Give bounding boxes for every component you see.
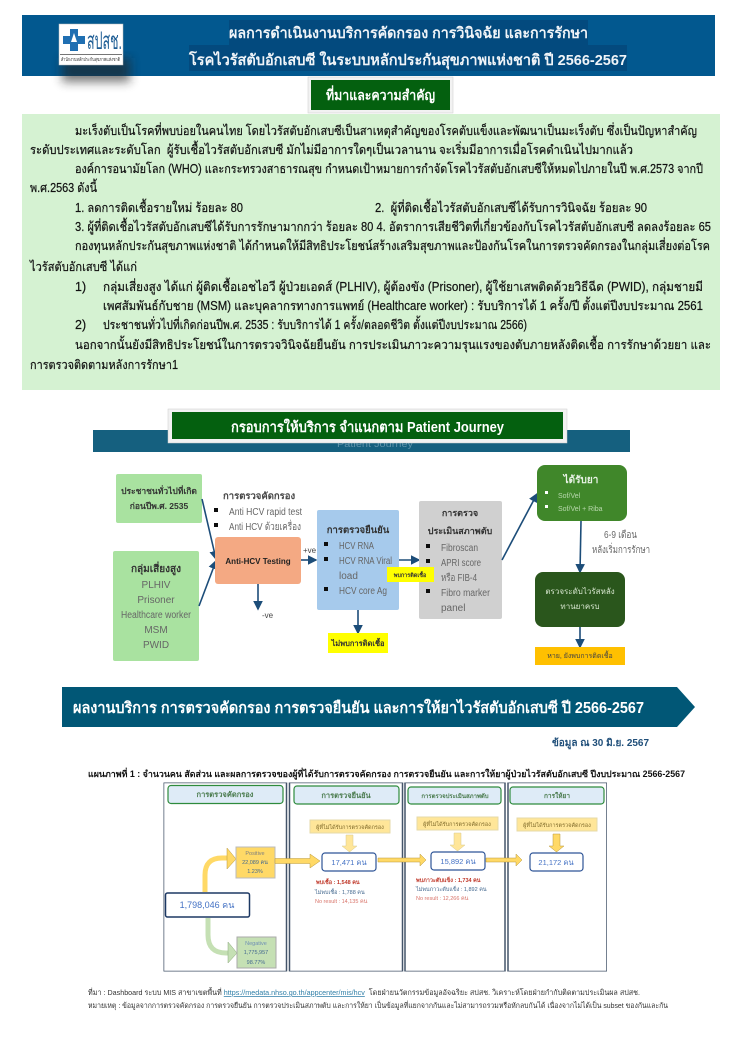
box: liver assessment: การตรวจ: [442, 508, 478, 518]
box: high risk group: PLHIV: [142, 580, 171, 591]
arrow: treatment to test: [580, 521, 581, 572]
arrow: to result: [579, 627, 581, 647]
text: screening list: Anti HCV ด้วยเครื่อง: [229, 519, 301, 533]
confirmation breakdown: [314, 877, 368, 905]
box: treatment count: 21,172 คน: [538, 858, 574, 867]
box: post-treatment viral test: [535, 572, 625, 627]
arrow: to liver assessment: [399, 559, 419, 561]
assessment breakdown: [415, 876, 487, 902]
panel: background text: 2. ผู้ที่ติดเชื้อไวรัสตับอักเสบซีได้รับการวินิจฉัย ร้อยละ 90: [375, 198, 647, 216]
label: infection found: [387, 567, 434, 582]
box: liver assessment: [419, 501, 502, 619]
confirmation breakdown: No result : 14,135 คน: [315, 899, 368, 905]
box: liver assessment: Fibroscan: [441, 543, 478, 554]
box: treatment: [537, 465, 627, 521]
label: no infection: ไม่พบการติดเชื้อ: [330, 637, 385, 648]
footnote: ที่มา : Dashboard ระบบ MIS สาขาเขตพื้นที่ https://medata.nhso.go.th/appcenter/mis/hcv โดยฝ่ายนวัตกรรมข้อมูลอัจฉริยะ สปสช. วิเคราะห์โดยฝ่ายกำกับติดตามประเมินผล สปสช.: [88, 987, 640, 997]
box: high risk group: Healthcare worker: [121, 610, 192, 621]
assessment breakdown: No result : 12,266 คน: [416, 896, 469, 902]
label: result: หาย, ยังพบการติดเชื้อ: [547, 649, 613, 660]
box: treatment: Sof/Vel: [558, 493, 581, 500]
text: screening list: การตรวจคัดกรอง: [223, 491, 295, 502]
label: 6-9 months: 6-9 เดือน: [604, 529, 637, 541]
panel: background text: 1): [75, 280, 86, 294]
panel: background text: 2): [75, 318, 86, 332]
box: positive: 1.23%: [247, 869, 263, 875]
arrow: to negative: [208, 918, 231, 953]
header banner: [22, 15, 715, 82]
box: confirmation: load: [339, 571, 358, 582]
arrow: to treatment count: [486, 854, 522, 866]
panel: liver assessment: ผู้ที่ไม่ได้รับการตรวจคัดกรอง: [423, 820, 491, 828]
confirmation breakdown: พบเชื้อ : 1,548 คน: [315, 877, 360, 886]
text: screening list: Anti HCV rapid test: [229, 507, 302, 518]
label: infection found: พบการติดเชื้อ: [393, 570, 426, 579]
panel: confirmation: ผู้ที่ไม่ได้รับการตรวจคัดกรอง: [316, 823, 384, 831]
box: confirmation: การตรวจยืนยัน: [327, 524, 390, 536]
panel: background text: ระดับประเทศและระดับโลก ผู้รับเชื้อไวรัสตับอักเสบซี มักไม่มีอาการใดๆเป็นเวลานาน จะเริ่มมีอาการเมื่อโรคดำเนินไปมากแล้ว: [30, 140, 633, 158]
box: liver assessment: หรือ FIB-4: [441, 572, 477, 584]
box: high risk group: MSM: [144, 625, 168, 636]
box: negative: 1,775,957: [244, 950, 268, 956]
box: treatment: ได้รับยา: [563, 473, 598, 486]
diagram: patient journey: [113, 465, 650, 665]
box: high risk group: PWID: [143, 640, 169, 651]
box: post-treatment viral test: ตรวจระดับไวรัสหลัง: [545, 587, 615, 596]
heading: patient journey: กรอบการให้บริการ จำแนกตาม Patient Journey: [231, 418, 504, 436]
box: post-treatment viral test: ทานยาครบ: [560, 602, 600, 611]
title: โรคไวรัสตับอักเสบซี ในระบบหลักประกันสุขภาพแห่งชาติ ปี 2566-2567: [188, 50, 627, 70]
banner: results heading: [62, 687, 695, 727]
box: liver assessment: Fibro marker: [441, 588, 491, 599]
logo: สำนักงานหลักประกันสุขภาพแห่งชาติ: [61, 56, 120, 63]
box: confirmation: HCV RNA: [339, 541, 374, 552]
box: confirmation count: [322, 853, 376, 871]
heading: background: ที่มาและความสำคัญ: [326, 85, 435, 104]
box: positive: 22,089 คน: [242, 860, 268, 866]
panel: background text: ไวรัสตับอักเสบซี ได้แก่: [29, 260, 137, 274]
panel: treatment: [486, 782, 607, 972]
label: result: [535, 647, 625, 665]
logo: [59, 24, 130, 82]
panel: background text: 1. ลดการติดเชื้อรายใหม่ ร้อยละ 80: [75, 198, 243, 215]
arrow: to treatment: [502, 494, 537, 560]
panel: screening: การตรวจคัดกรอง: [197, 790, 254, 799]
assessment breakdown: ไม่พบภาวะตับแข็ง : 1,892 คน: [415, 885, 487, 893]
panel: confirmation: การตรวจยืนยัน: [321, 791, 372, 800]
footnote: [88, 987, 668, 1010]
label: 6-9 months: [592, 529, 650, 556]
text: screening list: [214, 491, 302, 533]
box: positive: Positive: [245, 851, 265, 857]
panel: background text: [22, 114, 720, 390]
box: negative: [237, 937, 276, 968]
box: confirmation: HCV core Ag: [339, 586, 387, 597]
box: general population: [116, 474, 202, 523]
box: liver assessment: APRI score: [441, 558, 481, 569]
arrow: positive: [301, 546, 317, 560]
arrow: to assessment count: [378, 854, 426, 866]
assessment breakdown: พบภาวะตับแข็ง : 1,734 คน: [415, 876, 481, 884]
figure caption: แผนภาพที่ 1 : จำนวนคน สัดส่วน และผลการตรวจของผู้ที่ได้รับการตรวจคัดกรอง การตรวจยืนยัน และการให้ยาผู้ป่วยไวรัสตับอักเสบซี ปีงบประมาณ 2566-2567: [88, 767, 685, 780]
banner: results heading: ผลงานบริการ การตรวจคัดกรอง การตรวจยืนยัน และการให้ยาไวรัสตับอักเสบซี ปี 2566-2567: [73, 698, 644, 717]
box: confirmation: [317, 510, 399, 610]
heading: background: [308, 77, 453, 113]
panel: treatment: การให้ยา: [544, 791, 570, 800]
title: ผลการดำเนินงานบริการคัดกรอง การวินิจฉัย และการรักษา: [229, 24, 588, 42]
box: total screened: 1,798,046 คน: [180, 900, 234, 910]
arrow: to positive: [205, 858, 229, 892]
box: liver assessment: ประเมินสภาพตับ: [428, 526, 493, 536]
box: high risk group: กลุ่มเสี่ยงสูง: [131, 561, 181, 576]
heading: patient journey: [93, 409, 630, 452]
box: general population: ประชาชนทั่วไปที่เกิด: [121, 484, 197, 496]
panel: liver assessment: [378, 782, 505, 972]
panel: background text: ประชาชนทั่วไปที่เกิดก่อนปีพ.ศ. 2535 : รับบริการได้ 1 ครั้ง/ตลอดชีวิต ตั้งแต่ปีงบประมาณ 2566): [103, 315, 527, 332]
box: assessment count: [431, 852, 485, 870]
arrows: into testing: [199, 499, 216, 606]
box: liver assessment: panel: [441, 603, 465, 614]
box: confirmation: HCV RNA Viral: [339, 556, 392, 567]
arrow: negative: -ve: [262, 611, 274, 620]
arrow: positive: +ve: [303, 546, 317, 555]
box: negative: Negative: [245, 941, 267, 947]
panel: background text: พ.ศ.2563 ดังนี้: [30, 178, 97, 195]
arrow: to confirmation count: [275, 854, 320, 868]
heading: patient journey: Patient Journey: [337, 439, 414, 449]
panel: treatment: ผู้ที่ไม่ได้รับการตรวจคัดกรอง: [523, 821, 591, 829]
arrow: negative: [258, 584, 274, 620]
box: treatment count: [530, 853, 583, 871]
panel: liver assessment: การตรวจประเมินสภาพตับ: [421, 792, 489, 800]
label: no infection: [328, 633, 388, 653]
data date: ข้อมูล ณ 30 มิ.ย. 2567: [552, 737, 649, 750]
confirmation breakdown: ไม่พบเชื้อ : 1,788 คน: [314, 888, 365, 896]
label: 6-9 months: หลังเริ่มการรักษา: [592, 542, 650, 556]
box: positive: [236, 847, 275, 878]
box: high risk group: [113, 551, 199, 661]
footnote: หมายเหตุ : ข้อมูลจากการตรวจคัดกรอง การตรวจยืนยัน การตรวจประเมินสภาพตับ และการให้ยา เป็นข้อมูลที่แยกจากกันและไม่สามารถรวมหรือหักลบกันได้ เนื่องจากไม่ได้เป็น subset ของกันและกัน: [88, 1000, 668, 1010]
panel: background text: กลุ่มเสี่ยงสูง ได้แก่ ผู้ติดเชื้อเอชไอวี ผู้ป่วยเอดส์ (PLHIV), ผู้ต้องขัง (Prisoner), ผู้ใช้ยาเสพติดด้วยวิธีฉีด (PWID), กลุ่มชายมี: [103, 277, 703, 295]
box: treatment: Sof/Vel + Riba: [558, 506, 603, 513]
box: anti-HCV testing: Anti-HCV Testing: [225, 557, 291, 566]
panel: screening: [164, 782, 286, 972]
panel: background text: การตรวจติดตามหลังการรักษา1: [30, 358, 178, 372]
box: assessment count: 15,892 คน: [440, 857, 476, 866]
logo: สปสช.: [87, 28, 122, 55]
box: confirmation count: 17,471 คน: [331, 858, 367, 867]
box: high risk group: Prisoner: [137, 595, 175, 606]
box: total screened: [166, 893, 250, 917]
title: [188, 20, 627, 71]
box: general population: ก่อนปีพ.ศ. 2535: [130, 501, 188, 511]
panel: confirmation: [275, 782, 402, 972]
box: anti-HCV testing: [215, 537, 301, 584]
box: negative: 98.77%: [247, 960, 265, 966]
chart: service results flow: [164, 782, 607, 972]
arrow: to not found: [357, 610, 359, 633]
